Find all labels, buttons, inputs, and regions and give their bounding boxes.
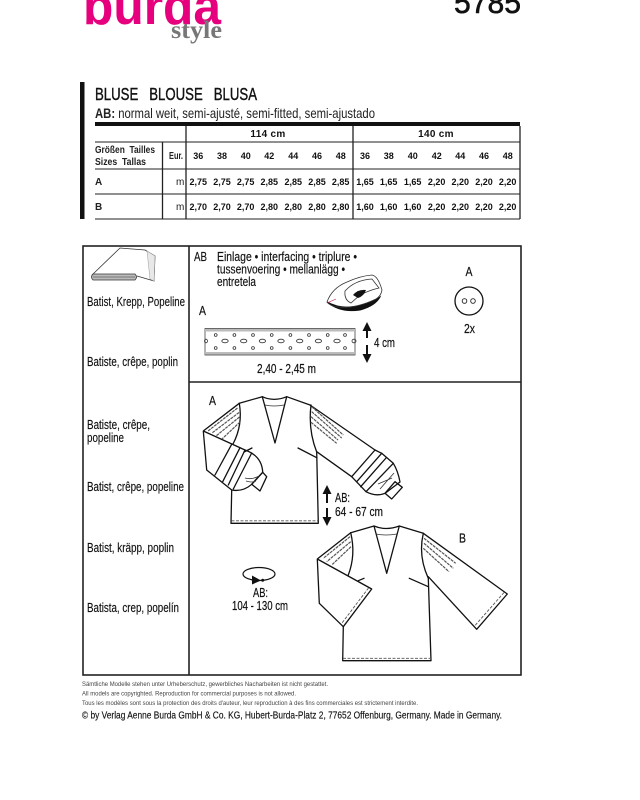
garment drawing: blouse B: B <box>459 530 466 545</box>
size labels: B <box>95 202 102 213</box>
row B: 2,20 <box>499 202 516 212</box>
sizes row: 46 <box>479 151 489 161</box>
subtitle: fit: AB: normal weit, semi-ajusté, semi-fitted, semi-ajustado <box>95 105 375 121</box>
sizes row: 42 <box>264 151 274 161</box>
fabric requirements table <box>95 122 520 219</box>
sizes row: 40 <box>241 151 251 161</box>
row A: 1,65 <box>404 177 421 187</box>
garment drawing: blouse B <box>317 526 507 661</box>
fabric suggestions: Batist, Krepp, Popeline <box>87 295 185 309</box>
interfacing text: AB <box>194 249 207 264</box>
interfacing strip: A <box>199 303 206 318</box>
row B: 1,60 <box>356 202 374 212</box>
blouse A left sleeve <box>203 403 267 491</box>
garment drawing: blouse A <box>203 393 402 523</box>
row B: 2,20 <box>428 202 445 212</box>
copyright notices: Tous les modèles sont sous la protection des droits d'auteur, leur reproduction à des fins commerciales est strictement interdite. <box>82 700 418 707</box>
sizes row <box>193 151 513 161</box>
belt measure icon <box>232 568 288 613</box>
interfacing strip: 2,40 - 2,45 m <box>257 361 316 376</box>
row B: 2,20 <box>452 202 469 212</box>
row B: 2,80 <box>285 202 302 212</box>
row A: 2,20 <box>428 177 445 187</box>
row A: 2,20 <box>452 177 469 187</box>
copyright notices: All models are copyrighted. Reproduction for commercial purposes is not allowed. <box>82 690 296 698</box>
blouse B left sleeve <box>317 533 372 627</box>
copyright notices: Sämtliche Modelle stehen unter Urheberschutz, gewerbliches Nacharbeiten ist nicht gestattet. <box>82 681 328 688</box>
row B: 2,80 <box>332 202 349 212</box>
width headers: 114 cm <box>250 129 286 140</box>
fabric suggestions: popeline <box>87 431 124 445</box>
interfacing text <box>194 249 357 289</box>
size labels: A <box>95 177 102 188</box>
row B: 2,70 <box>213 202 231 212</box>
fabric suggestions: Batista, crep, popelín <box>87 601 179 615</box>
sizes row: 38 <box>384 151 394 161</box>
fabric suggestions: Batist, kräpp, poplin <box>87 541 174 555</box>
fabric suggestions: Batiste, crêpe, <box>87 418 150 432</box>
row B: 2,80 <box>308 202 326 212</box>
interfacing text: entretela <box>217 275 256 289</box>
interfacing strip <box>199 303 356 376</box>
size labels: Sizes Tallas <box>95 157 146 168</box>
blouse B body <box>343 526 431 661</box>
row B: 1,60 <box>404 202 421 212</box>
row A: 2,75 <box>237 177 254 187</box>
sizes row: 48 <box>336 151 346 161</box>
fabric suggestions <box>87 295 185 615</box>
fabric suggestions: Batist, crêpe, popeline <box>87 480 184 494</box>
row B: 2,80 <box>261 202 278 212</box>
row A: 2,20 <box>475 177 493 187</box>
icon: button: 2x <box>464 321 475 336</box>
sizes row: 44 <box>455 151 465 161</box>
sizes row: 42 <box>432 151 442 161</box>
row A <box>190 177 516 187</box>
size labels: m <box>176 202 184 213</box>
sizes row: 36 <box>360 151 370 161</box>
sizes row: 38 <box>217 151 227 161</box>
blouse B right sleeve <box>423 533 507 629</box>
icon: fabric bolt <box>92 248 155 281</box>
heading accent bar <box>80 82 84 219</box>
sizes row: 40 <box>408 151 418 161</box>
size labels: Größen Tailles <box>95 145 155 156</box>
row A: 2,75 <box>213 177 231 187</box>
size labels: Eur. <box>169 151 183 162</box>
row B: 2,70 <box>190 202 207 212</box>
sizes row: 48 <box>503 151 513 161</box>
icon: iron <box>327 275 382 311</box>
size labels <box>95 145 184 213</box>
copyright notices <box>82 681 502 722</box>
fabric suggestions: Batiste, crêpe, poplin <box>87 355 178 369</box>
row B: 1,60 <box>380 202 397 212</box>
sizes row: 36 <box>193 151 203 161</box>
size labels: m <box>176 177 184 188</box>
row A: 1,65 <box>356 177 374 187</box>
sizes row: 46 <box>312 151 322 161</box>
row B: 2,20 <box>475 202 493 212</box>
garment drawing: blouse A: A <box>209 393 216 408</box>
title: BLUSE BLOUSE BLUSA <box>95 84 257 104</box>
row A: 2,85 <box>285 177 302 187</box>
icon: button: A <box>466 264 473 279</box>
row B: 2,70 <box>237 202 254 212</box>
belt measure icon: AB: <box>253 585 268 600</box>
arrow: 4 cm width: 4 cm <box>374 335 395 350</box>
blouse A body <box>231 397 318 523</box>
main panel frame <box>83 246 521 675</box>
row A: 2,20 <box>499 177 516 187</box>
row A: 2,85 <box>308 177 326 187</box>
arrow: length measure: 64 - 67 cm <box>335 504 383 519</box>
arrow: length measure <box>322 485 383 526</box>
row A: 2,85 <box>261 177 278 187</box>
arrow: length measure: AB: <box>335 490 350 505</box>
logo: burda style: style <box>171 17 222 44</box>
row B <box>190 202 516 212</box>
belt measure icon: 104 - 130 cm <box>232 598 288 613</box>
row A: 2,75 <box>190 177 207 187</box>
blouse A right sleeve <box>310 405 402 499</box>
width headers <box>250 129 454 140</box>
icon: button <box>455 264 483 336</box>
interfacing text: Einlage • interfacing • triplure • <box>217 250 357 264</box>
copyright notices: © by Verlag Aenne Burda GmbH & Co. KG, Hubert-Burda-Platz 2, 77652 Offenburg, Germany. Made in Germany. <box>82 710 502 722</box>
width headers: 140 cm <box>418 129 454 140</box>
interfacing text: tussenvoering • mellanlägg • <box>217 262 345 276</box>
sizes row: 44 <box>288 151 298 161</box>
arrow: 4 cm width <box>362 322 395 363</box>
row A: 1,65 <box>380 177 397 187</box>
row A: 2,85 <box>332 177 349 187</box>
